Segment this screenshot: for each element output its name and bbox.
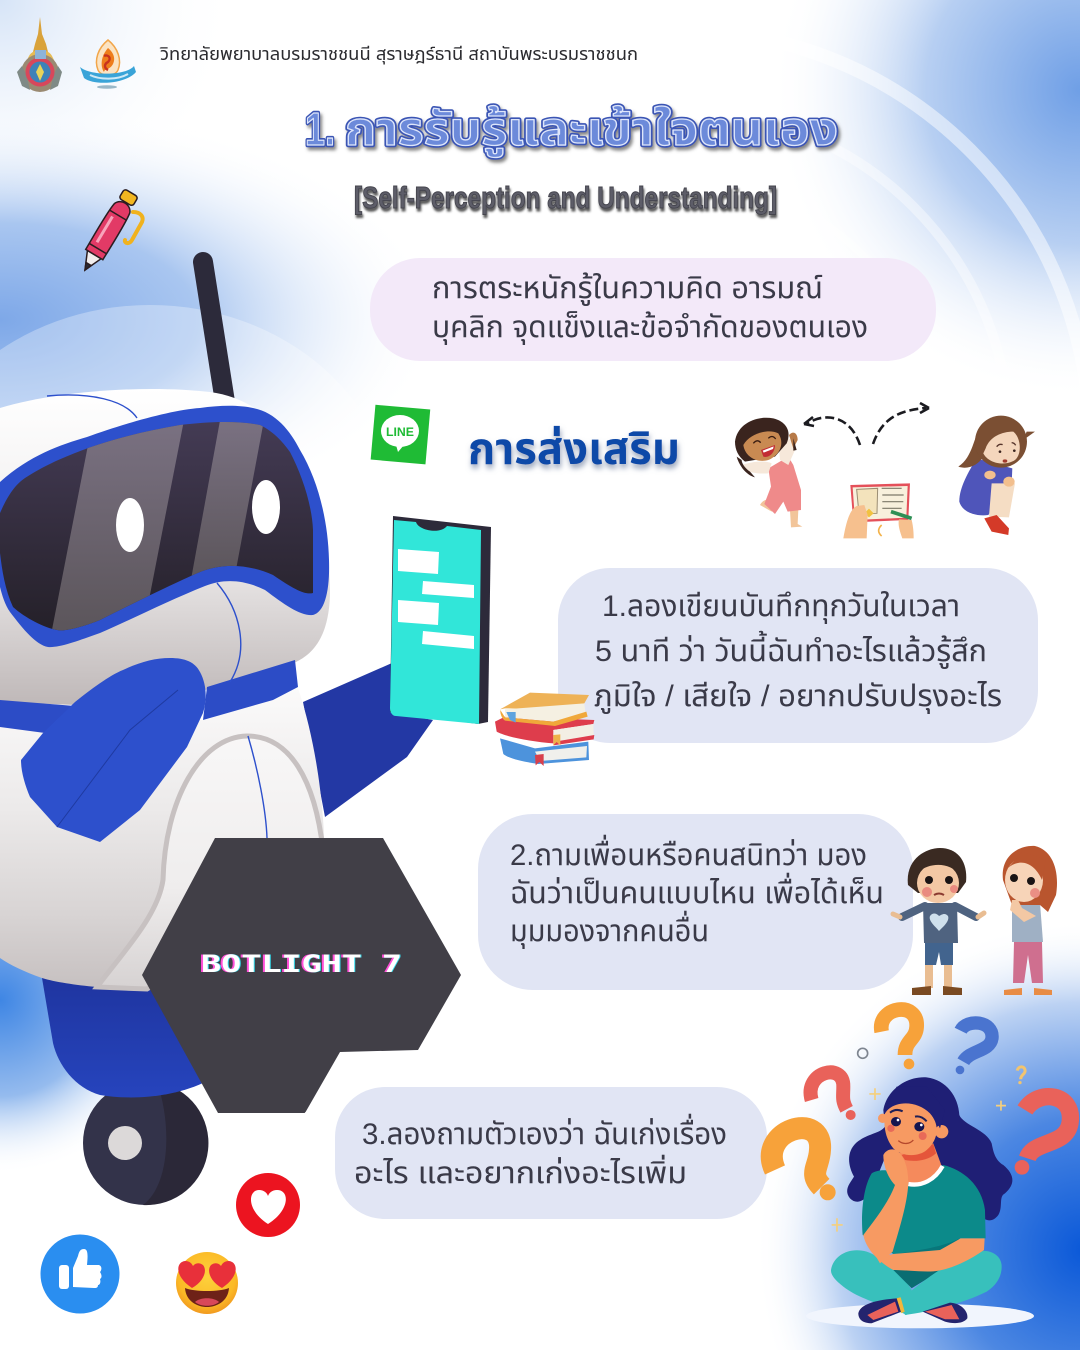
icon: LINE: LINE (386, 425, 414, 439)
bubble 3: 3.ลองถามตัวเองว่า ฉันเก่งเรื่อง (362, 1113, 727, 1151)
icon: heart reaction (236, 1173, 300, 1237)
robot head (0, 389, 330, 705)
woman hair (847, 1077, 1012, 1220)
purple definition bubble: การตระหนักรู้ในความคิด อารมณ์ (432, 272, 823, 306)
robot visor glass (0, 415, 320, 640)
illustration: thinking woman (806, 1077, 1034, 1328)
bubble 3 (335, 1087, 767, 1219)
robot (0, 262, 433, 1205)
woman arms (863, 1149, 985, 1271)
badge: BOTLIGHT 7 (142, 838, 461, 1113)
woman shoes (858, 1297, 967, 1323)
bubble 1: ภูมิใจ / เสียใจ / อยากปรับปรุงอะไร (594, 680, 1002, 714)
bubble 3: อะไร และอยากเก่งอะไรเพิ่ม (354, 1154, 687, 1190)
purple definition bubble (370, 258, 936, 361)
illustration: happy girl (735, 418, 802, 527)
woman legs (831, 1250, 1002, 1315)
bubble 2: 2.ถามเพื่อนหรือคนสนิทว่า มอง (510, 834, 867, 872)
question mark: orange large (772, 1128, 836, 1200)
robot visor frame (0, 406, 329, 647)
bubble 1: 1.ลองเขียนบันทึกทุกวันในเวลา (602, 590, 960, 624)
robot antenna (203, 262, 225, 402)
illustration: red-haired girl (1003, 846, 1057, 995)
robot collar (0, 660, 298, 733)
bubble 2 (478, 814, 913, 990)
header text: วิทยาลัยพยาบาลบรมราชชนนี สุราษฎร์ธานี สถาบันพระบรมราชชนก (160, 44, 638, 65)
icon: stack of books (495, 693, 594, 766)
woman neck (898, 1143, 942, 1184)
badge: BOTLIGHT 7: BOTLIGHT 7 (201, 950, 402, 978)
title: 1. (305, 103, 335, 155)
icon: heart-eyes emoji (176, 1252, 238, 1314)
small decorations (832, 1048, 1025, 1232)
arrows: two dashed directions (804, 403, 929, 445)
question mark: red right (1015, 1097, 1070, 1175)
question mark: red left (811, 1072, 856, 1120)
illustration: boy (893, 848, 984, 995)
logo: institute flame and ribbon (80, 40, 136, 89)
woman shirt (862, 1165, 986, 1254)
title: การรับรู้และเข้าใจตนเอง (345, 103, 838, 157)
ground shadow (806, 1304, 1034, 1328)
question marks and sparkles (772, 1010, 1070, 1232)
robot body (0, 688, 324, 989)
question mark: blue (956, 1023, 992, 1074)
phone (390, 516, 491, 724)
robot arm joint (97, 736, 323, 989)
robot lower blue section (42, 978, 215, 1097)
heading: promotion: การส่งเสริม (468, 425, 680, 474)
purple definition bubble: บุคลิก จุดแข็งและข้อจำกัดของตนเอง (432, 311, 868, 345)
icon: LINE (371, 405, 430, 464)
icon: like reaction (40, 1234, 120, 1314)
bubble 2: ฉันว่าเป็นคนแบบไหน เพื่อได้เห็น (510, 872, 884, 910)
robot wheel (83, 1081, 208, 1205)
robot eyes (116, 480, 280, 552)
woman face (878, 1087, 948, 1155)
bubble 1: 5 นาที ว่า วันนี้ฉันทำอะไรแล้วรู้สึก (595, 630, 987, 669)
title: 1. (305, 103, 335, 155)
icon: pen (76, 188, 143, 275)
title: การรับรู้และเข้าใจตนเอง (345, 103, 838, 157)
illustration: open diary and hands (843, 483, 914, 538)
question mark: orange top (881, 1010, 917, 1069)
illustration: sad girl (958, 416, 1035, 535)
logo: nursing college emblem (17, 17, 62, 92)
robot scarf (21, 658, 206, 842)
bubble 2: มุมมองจากคนอื่น (510, 910, 709, 949)
robot arm (303, 663, 433, 817)
bubble 1 (558, 568, 1038, 743)
subtitle: [Self-Perception and Understanding] (354, 180, 777, 215)
